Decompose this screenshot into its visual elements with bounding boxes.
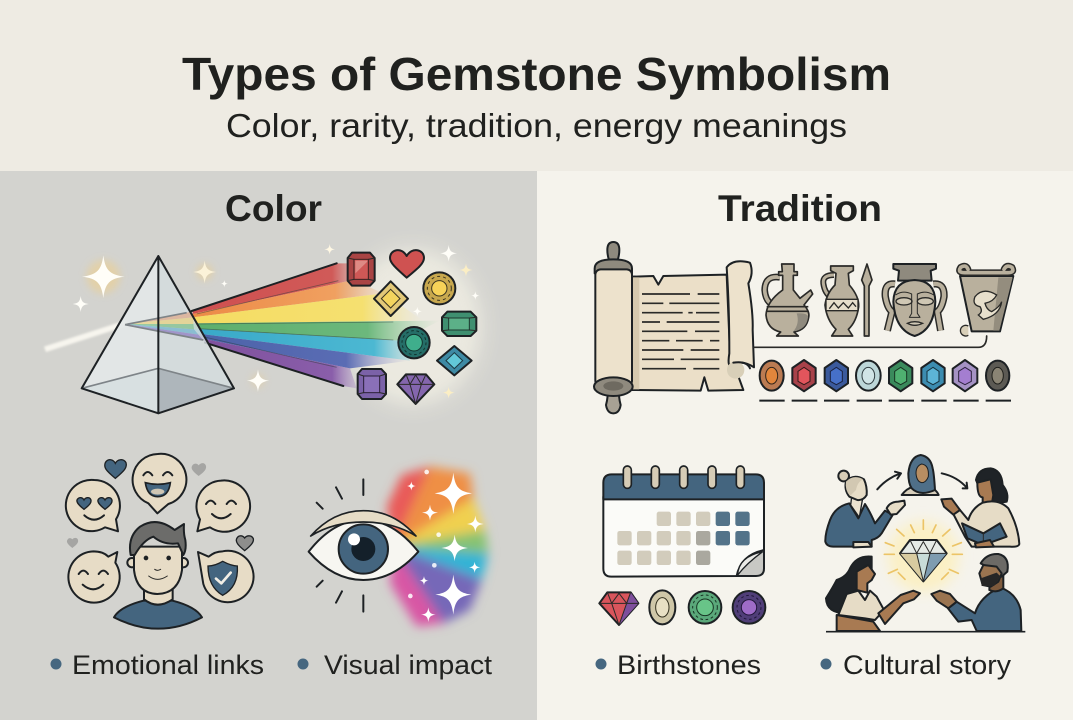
- bullet: Birthstones: Birthstones: [617, 650, 761, 680]
- flow arrows: [877, 472, 967, 489]
- eye rays: [317, 479, 363, 612]
- gem: blue hexagon: [825, 360, 848, 391]
- speech bubble: laughing: [133, 454, 186, 513]
- calendar rings: [623, 466, 744, 488]
- speech bubble: shield check: [198, 551, 254, 602]
- gem: green hexagon: [889, 360, 912, 391]
- person: woman long hair: [826, 556, 920, 631]
- person: woman in hijab: [902, 455, 939, 495]
- glow behind gems: [345, 248, 482, 405]
- illustration: person with emotions: [66, 454, 254, 629]
- gem row: [759, 360, 1011, 401]
- gem: yellow diamond: [374, 281, 408, 316]
- artifact: mask amphora: [885, 264, 944, 336]
- sparkles: [73, 244, 480, 399]
- bullet: Emotional links: Emotional links: [72, 650, 264, 680]
- eye: [309, 511, 418, 580]
- gem: heart: [390, 250, 424, 278]
- rainbow sparkles: [407, 470, 484, 622]
- calendar page: [603, 474, 764, 577]
- bullet: Visual impact: Visual impact: [324, 650, 493, 680]
- gem: purple brilliant: [397, 374, 434, 404]
- small hearts: [67, 460, 253, 551]
- glass prism: [82, 256, 234, 413]
- artifact: spear: [862, 264, 872, 336]
- illustration: birthstone calendar: [599, 466, 765, 625]
- heading: Tradition: Tradition: [718, 188, 882, 229]
- subtitle: Color, rarity, tradition, energy meanings: [226, 107, 847, 144]
- artifact: jug: [765, 264, 813, 336]
- gem: blue diamond: [437, 346, 472, 375]
- name placeholders: [759, 398, 1011, 404]
- ground line: [826, 629, 1025, 634]
- panel: left background: [0, 171, 537, 720]
- scroll: [594, 242, 754, 413]
- gem: purple round: [733, 591, 765, 624]
- rainbow glow: [387, 467, 488, 627]
- gem: beige oval: [649, 590, 675, 624]
- speech bubble: heart eyes: [66, 480, 120, 531]
- connector line: [754, 336, 987, 347]
- gem: orange oval: [760, 361, 784, 391]
- gem: round teal: [398, 327, 430, 358]
- person: woman with book: [941, 468, 1019, 547]
- person: woman with bun: [825, 471, 905, 547]
- title: Types of Gemstone Symbolism: [182, 48, 891, 100]
- gem: dark oval: [986, 361, 1009, 391]
- heading: Color: Color: [225, 188, 322, 229]
- illustration: eye with rainbow: [309, 467, 488, 627]
- gem: red emerald cut: [348, 253, 375, 286]
- gem: ruby brilliant: [599, 592, 638, 625]
- header band: [0, 0, 1073, 171]
- panel: right background: [537, 171, 1073, 720]
- gem: purple square: [358, 369, 386, 399]
- gem: round gold: [423, 272, 455, 304]
- illustration: scroll, artifacts and gem row: [594, 242, 1013, 413]
- gem: red hexagon: [792, 360, 816, 391]
- illustration: people sharing cultural story: [825, 455, 1025, 632]
- speech bubble: smile left: [68, 551, 120, 603]
- glowing diamond: [884, 520, 962, 592]
- gem: pale blue oval: [856, 361, 881, 391]
- incoming white light beam: [44, 320, 127, 352]
- gem: teal hexagon: [921, 360, 945, 391]
- calendar date cells: [617, 512, 750, 565]
- bullet: Cultural story: Cultural story: [843, 650, 1012, 680]
- illustration: prism splitting light onto gems: [44, 244, 482, 413]
- artifact: vase: [823, 266, 859, 336]
- rainbow beam: [192, 263, 440, 388]
- person: [114, 522, 202, 629]
- gem: violet hexagon: [953, 360, 977, 391]
- artifact: painted cup: [960, 266, 1013, 336]
- speech bubble: smile right: [196, 480, 250, 532]
- gem: green rectangle: [442, 312, 476, 336]
- gem: green round: [689, 591, 721, 624]
- person: bearded man: [931, 554, 1021, 631]
